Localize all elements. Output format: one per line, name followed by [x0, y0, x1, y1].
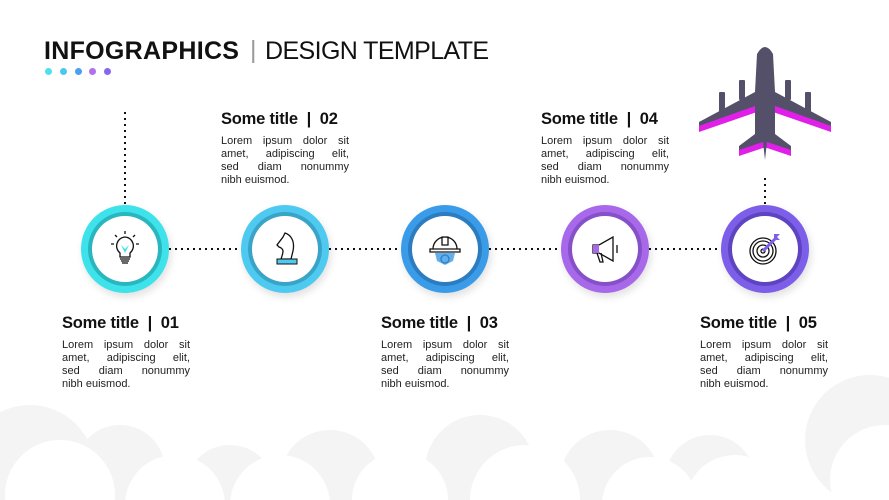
- text block 01: nibh euismod.: [62, 378, 130, 390]
- text block 04: nibh euismod.: [541, 174, 610, 186]
- text block 05: amet, adipiscing elit,: [700, 352, 828, 364]
- step 4 circle: megaphone: [561, 205, 649, 293]
- text block 02: Lorem ipsum dolor sit: [221, 135, 349, 147]
- text block 03: nibh euismod.: [381, 378, 450, 390]
- title: DESIGN TEMPLATE: [265, 37, 488, 65]
- text block 05: nibh euismod.: [700, 378, 768, 390]
- icon: airplane: [699, 47, 831, 160]
- text block 03: amet, adipiscing elit,: [381, 352, 509, 364]
- text block 02: [221, 110, 349, 186]
- text block 05: [700, 314, 828, 390]
- text block 02: nibh euismod.: [221, 174, 290, 186]
- text block 05: Lorem ipsum dolor sit: [700, 339, 828, 351]
- text block 05: sed diam nonummy: [700, 365, 828, 377]
- text block 04: Lorem ipsum dolor sit: [541, 135, 669, 147]
- step 5 circle: target: [721, 205, 809, 293]
- text block 01: [62, 314, 190, 390]
- step 2 circle: chess knight: [241, 205, 329, 293]
- text block 01: Some title | 01: [62, 314, 179, 332]
- text block 01: sed diam nonummy: [62, 365, 190, 377]
- step 3 circle: helmet gear: [401, 205, 489, 293]
- title: |: [250, 36, 256, 64]
- text block 02: Some title | 02: [221, 110, 338, 128]
- title: [44, 36, 488, 65]
- step 1 circle: lightbulb: [81, 205, 169, 293]
- text block 04: amet, adipiscing elit,: [541, 148, 669, 160]
- text block 01: Lorem ipsum dolor sit: [62, 339, 190, 351]
- title: INFOGRAPHICS: [44, 37, 239, 65]
- text block 04: [541, 110, 669, 186]
- text block 03: Lorem ipsum dolor sit: [381, 339, 509, 351]
- text block 02: sed diam nonummy: [221, 161, 349, 173]
- text block 03: Some title | 03: [381, 314, 498, 332]
- title dots: [45, 68, 111, 75]
- text block 03: sed diam nonummy: [381, 365, 509, 377]
- text block 04: Some title | 04: [541, 110, 658, 128]
- text block 03: [381, 314, 509, 390]
- text block 04: sed diam nonummy: [541, 161, 669, 173]
- text block 05: Some title | 05: [700, 314, 817, 332]
- text block 02: amet, adipiscing elit,: [221, 148, 349, 160]
- text block 01: amet, adipiscing elit,: [62, 352, 190, 364]
